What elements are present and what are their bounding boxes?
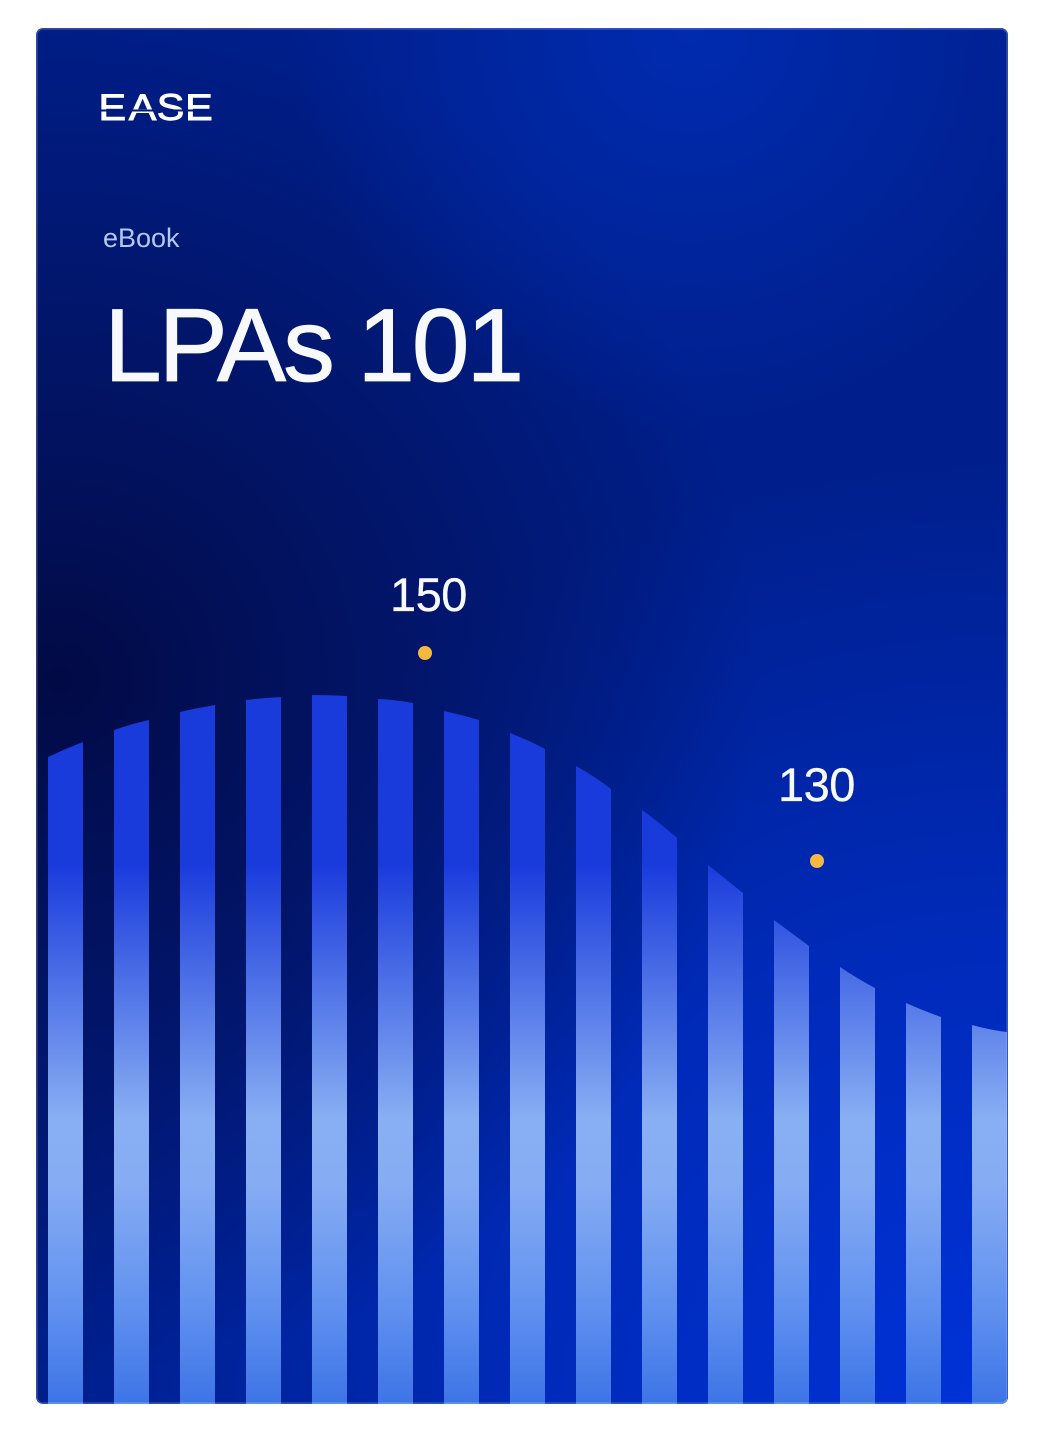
data label: 130: 130 (778, 758, 855, 811)
marker: 150 dot (418, 646, 432, 660)
data label: 150: 150 (390, 568, 467, 621)
bar chart: curved striped area (48, 695, 1007, 1404)
logo: EASE: EASE (99, 87, 213, 128)
label: eBook: eBook (103, 223, 180, 253)
marker: 130 dot (810, 854, 824, 868)
title: LPAs 101: LPAs 101 (104, 288, 521, 404)
